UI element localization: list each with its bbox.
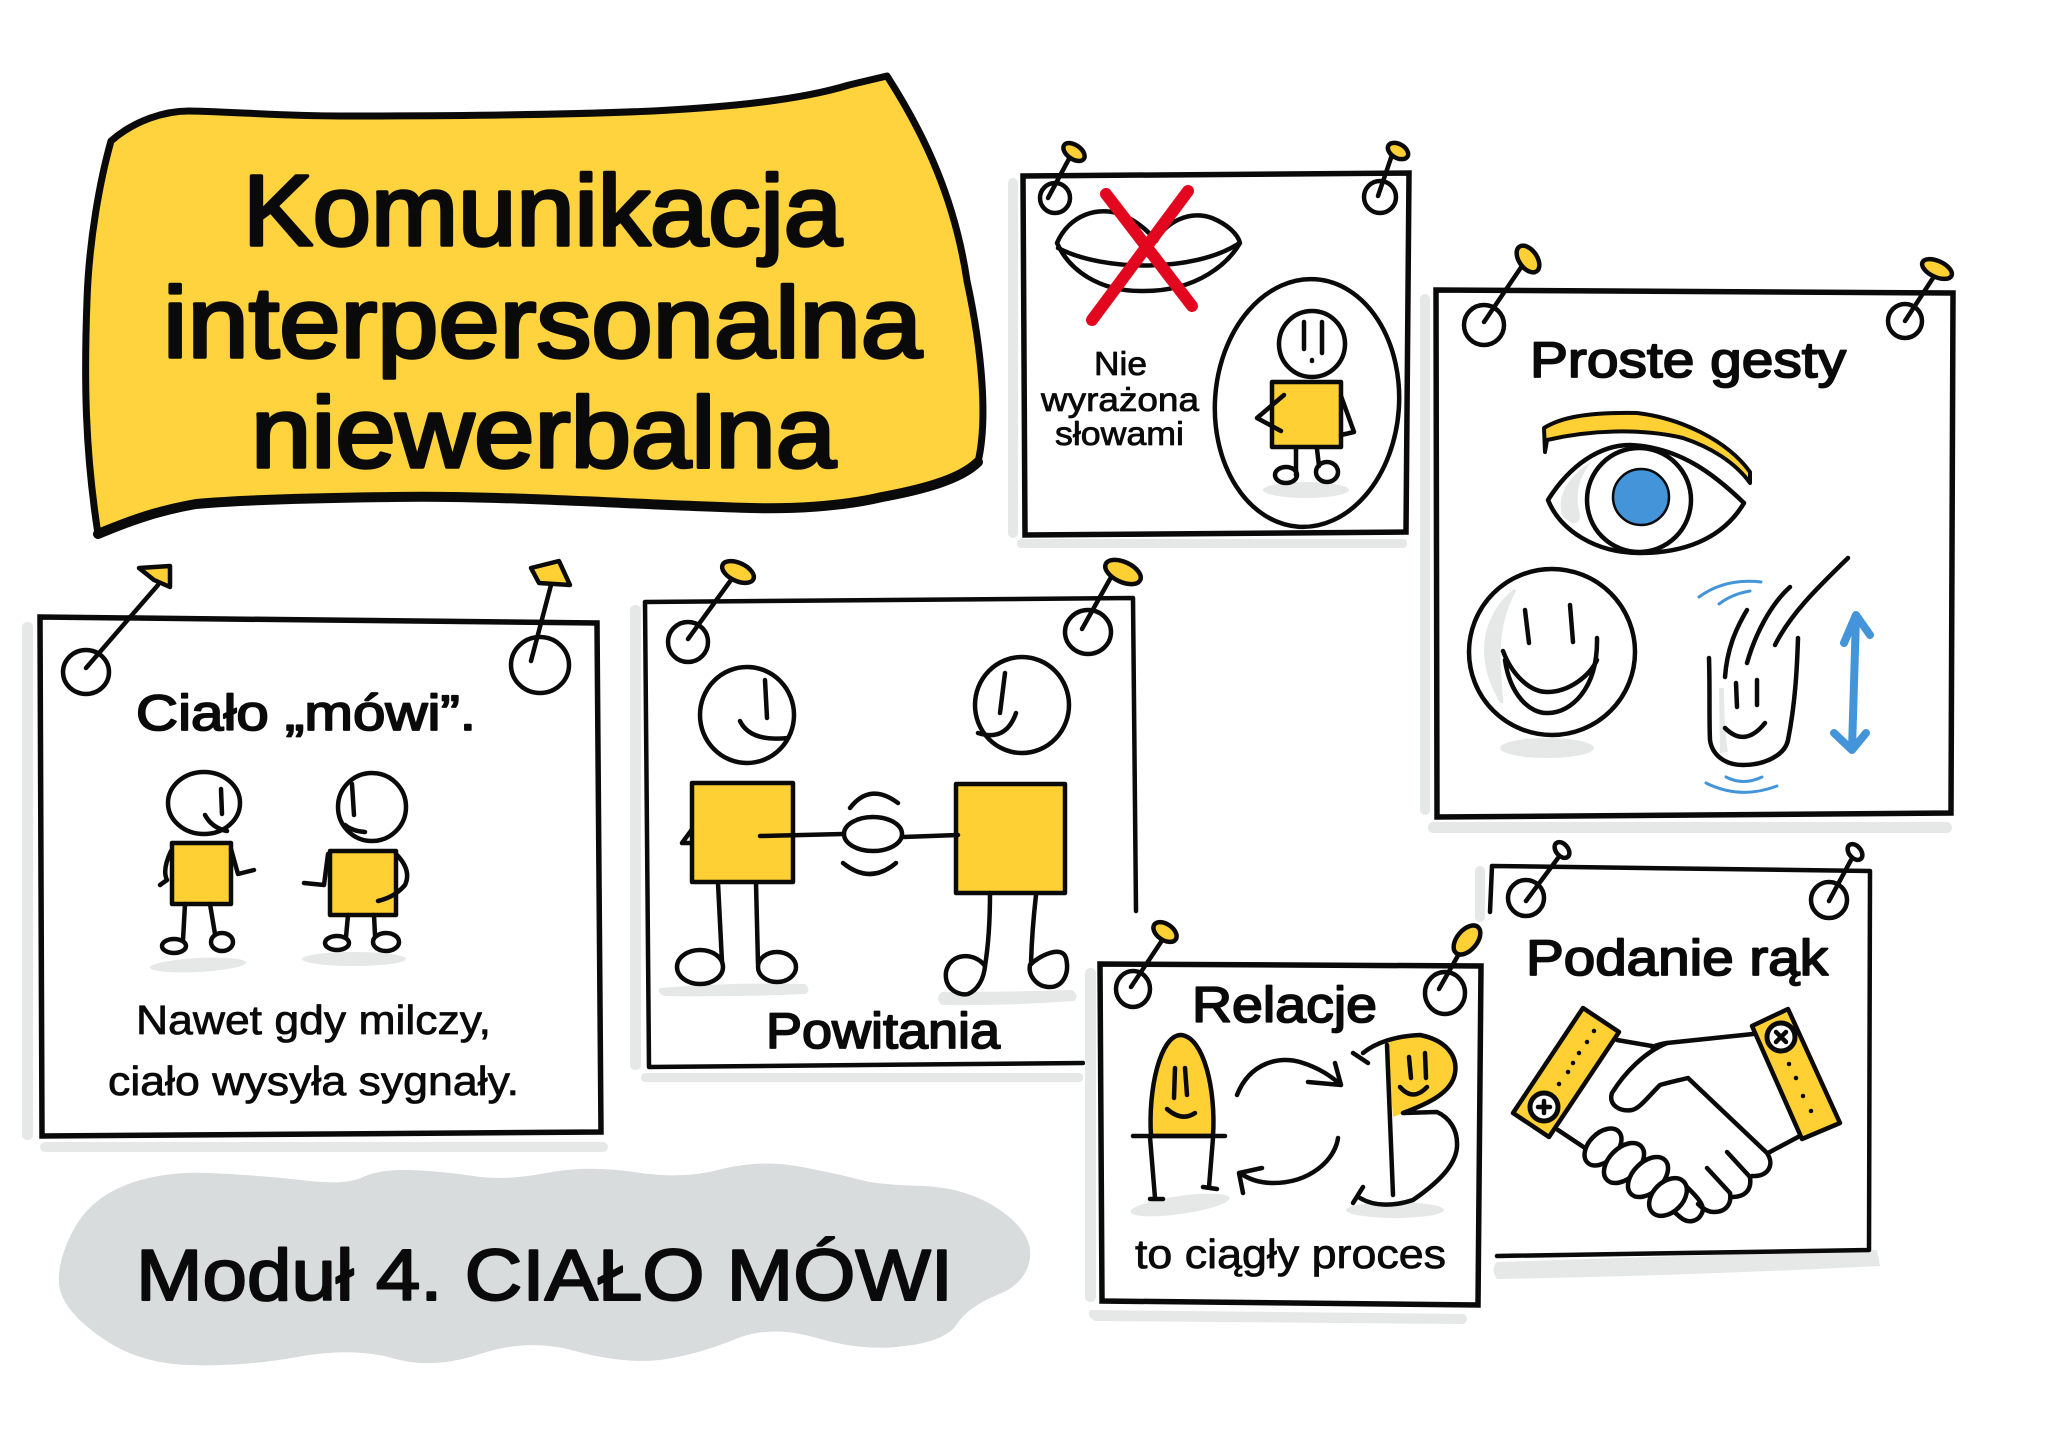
icon: blue double arrow [1834,615,1870,750]
pin right [1065,555,1144,654]
title banner [86,76,983,534]
panel: Proste gesty [1420,242,1955,833]
module cloud [59,1163,1030,1365]
icon: lips crossed out [1057,191,1240,320]
pin left [1508,839,1572,916]
pin right [1425,921,1486,1014]
person right [938,657,1077,1005]
icon: eye [1544,413,1750,553]
pin right [1811,841,1865,918]
panel: Podanie rąk [1475,839,1880,1279]
module label: Moduł 4. CIAŁO MÓWI [136,1236,953,1316]
arrows: cycle [1237,1060,1341,1193]
heading: Podanie rąk [1526,930,1829,986]
caption: Nawet gdy milczy, [136,997,491,1043]
pin left [1040,139,1088,213]
text: wyrażona [1040,381,1200,418]
title text: Komunikacja [243,155,842,267]
pin left [63,566,170,694]
text [1040,345,1200,452]
pin right [511,561,570,693]
panel: Powitania [630,555,1144,1082]
figure right [1346,1035,1457,1218]
text: słowami [1055,415,1184,452]
pin left [668,557,757,662]
icon: smiling face [1469,569,1635,758]
figure right [302,773,407,966]
panel: Ciało mówi [22,561,608,1152]
pin right [1364,139,1411,213]
person left [659,667,808,996]
heading: Proste gesty [1530,332,1846,388]
panel: Nie wyrażona słowami [1008,139,1411,548]
title text: interpersonalna [163,267,922,379]
caption: Powitania [766,1003,1000,1059]
heading: Relacje [1192,977,1377,1033]
caption [108,997,519,1104]
title text [163,155,922,489]
text: Nie [1094,345,1147,382]
icon: handshake [1513,1008,1840,1223]
handshake link [760,794,958,874]
icon: nodding head [1699,558,1848,792]
figure left [1129,1035,1231,1221]
pin right [1888,255,1955,338]
caption: ciało wysyła sygnały. [108,1058,519,1104]
title text: niewerbalna [251,377,836,489]
caption: to ciągły proces [1135,1231,1446,1277]
pin left [1464,242,1544,345]
pin left [1116,918,1180,1007]
oval with figure [1207,273,1407,533]
heading: Ciało „mówi”. [136,685,476,741]
panel: Relacje [1085,918,1486,1324]
figure left [150,772,254,975]
